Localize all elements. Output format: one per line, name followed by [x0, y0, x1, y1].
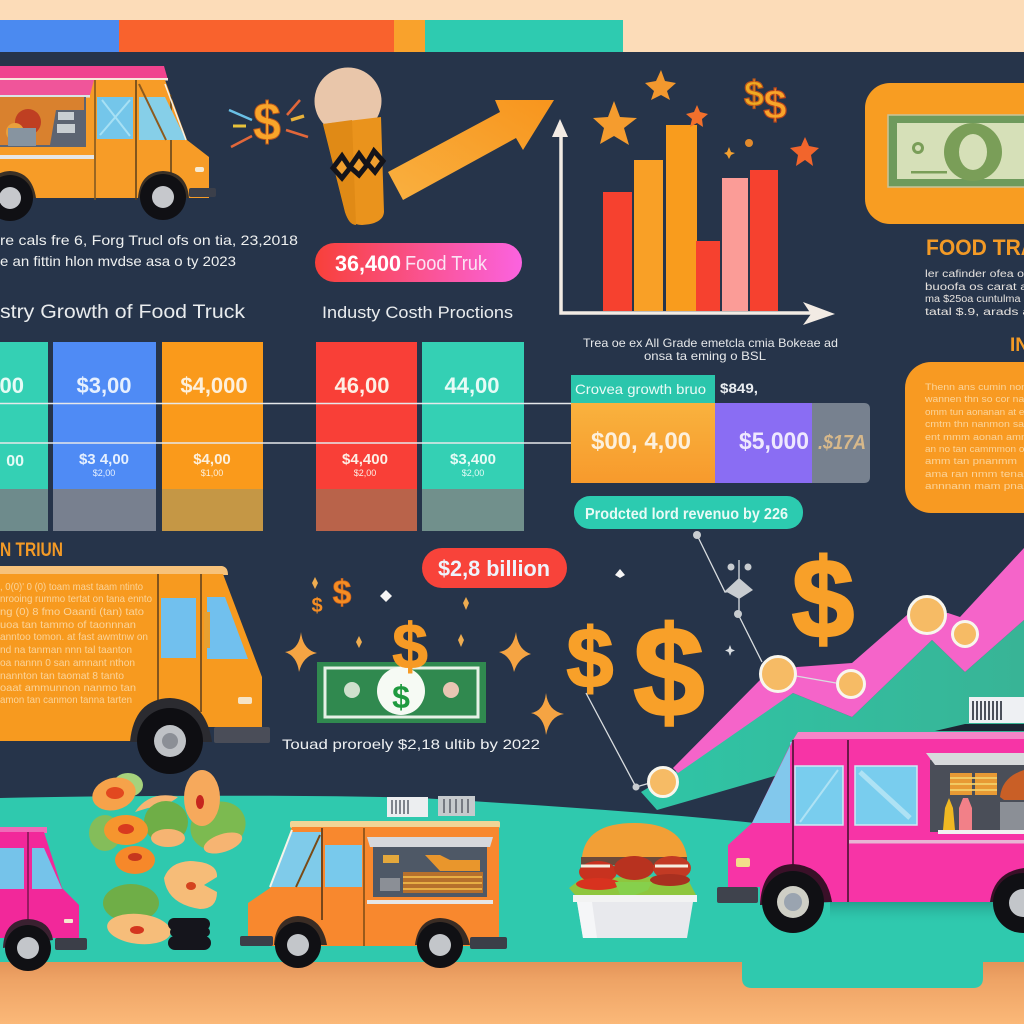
lower orange band	[0, 950, 1024, 1024]
icon: food slices	[89, 770, 253, 950]
icon: large orange truck with text	[0, 566, 270, 774]
chart bars	[603, 125, 778, 311]
panel: stacked revenue bar: $849,	[720, 380, 758, 396]
callout pill: projected revenue: Prodcted lord revenuo by 226	[585, 506, 788, 523]
truck body text: nd na tanman nnn tal taanton	[0, 644, 132, 656]
card body text: Thenn ans cumin nont	[925, 382, 1024, 393]
truck body text	[0, 581, 152, 706]
icon: orange truck bottom	[240, 796, 507, 968]
column: blue	[53, 342, 156, 531]
icon: burger	[569, 823, 697, 938]
text block: top left summary	[0, 232, 298, 269]
heading: industry cost projections: Industy Costh Proctions	[322, 303, 513, 322]
column: blue: $3 4,00	[79, 451, 129, 468]
icon: dollar bill with sparkles	[285, 574, 564, 735]
caption: total projected: Touad proroely $2,18 ultib by 2022	[282, 736, 540, 752]
text block: right description: tatal $.9, arads ar	[925, 307, 1024, 318]
panel: stacked revenue bar: .$17A	[818, 432, 866, 454]
column: red: $2,00	[354, 468, 376, 478]
card body text: ent mmm aonan amm	[925, 432, 1024, 443]
column: red: 46,00	[334, 373, 390, 398]
card body text: cmtm thn nanmon san	[925, 419, 1024, 430]
icon: dollar bill with sparkles: $	[311, 595, 323, 617]
callout pill: billion: $2,8 billion	[438, 556, 550, 581]
text block: top left summary: re cals fre 6, Forg Trucl ofs on tia, 23,2018	[0, 232, 298, 248]
area under ribbon	[641, 620, 1024, 840]
icon: large dollar left: $	[567, 611, 613, 705]
column: orange	[162, 342, 263, 531]
icon: dollar with burst: $	[253, 92, 281, 152]
column: teal 2: 44,00	[444, 373, 500, 398]
line chart: pink growth ribbon	[586, 531, 1024, 840]
chart axes	[561, 135, 815, 313]
column: blue: $2,00	[93, 468, 115, 478]
text block: top left summary: e an fittin hlon mvdse asa o ty 2023	[0, 253, 236, 269]
truck body text: ng (0) 8 fmo Oaanti (tan) tato	[0, 606, 144, 618]
bar columns	[0, 342, 524, 531]
column: red	[316, 342, 417, 531]
truck body text: nannton tan taomat 8 tanto	[0, 670, 124, 682]
text block: right description: ma $25oa cuntulma as	[925, 294, 1024, 305]
bar chart	[552, 119, 835, 325]
icon: dollar bill with sparkles: $	[392, 679, 410, 715]
icon: dollar with burst	[229, 92, 308, 152]
callout pill: food truck count: Food Truk	[405, 253, 488, 275]
card body text: wannen thn so cor nan	[924, 394, 1024, 405]
column: teal 2	[422, 342, 524, 531]
column: red: $4,400	[342, 451, 388, 468]
connecting lines	[586, 531, 836, 790]
column: blue: $3,00	[76, 373, 132, 398]
truck body text: nrooing rummo tertat on tana ennto	[0, 593, 152, 605]
truck body text: , 0(0)' 0 (0) toam mast taam ntinto	[0, 581, 143, 593]
column: orange: $4,00	[193, 451, 231, 468]
icon: large dollar centre: $	[633, 601, 705, 744]
panel: stacked revenue bar: Crovea growth bruo	[575, 381, 706, 397]
icon: dollar bill with sparkles: $	[392, 610, 428, 682]
ribbon band	[673, 548, 1024, 773]
icon: large pink truck	[717, 697, 1024, 933]
icon: large dollar right: $	[792, 536, 854, 661]
icon: dollar bill with sparkles: $	[333, 574, 352, 612]
chart data points	[648, 596, 978, 796]
panel: chart caption: Trea oe ex All Grade emetcla cmia Bokeae ad	[583, 336, 838, 350]
icons: stars and dollars above chart: $	[763, 81, 787, 128]
column: teal: 00	[6, 453, 24, 470]
dark main panel	[0, 52, 1024, 852]
icon: orange food truck top left	[0, 66, 216, 221]
icon: cone with scoop	[314, 68, 384, 225]
teal ground band	[0, 796, 1024, 988]
column: teal 2: $2,00	[462, 468, 484, 478]
top colour bar	[0, 20, 623, 54]
arrow: growth	[388, 100, 554, 200]
icons: stars and dollars above chart: $	[744, 73, 764, 114]
card body text	[924, 382, 1024, 492]
panel: stacked revenue bar: $00, 4,00	[591, 428, 691, 455]
panel: orange text card	[905, 362, 1024, 513]
panel: chart caption: onsa ta eming o BSL	[644, 349, 766, 363]
card body text: ama ran nmm tenan	[925, 469, 1024, 480]
panel: stacked revenue bar	[571, 375, 870, 483]
panel: money card	[865, 83, 1024, 224]
icons: stars and dollars above chart	[593, 70, 819, 166]
heading: truck section: N TRIUN	[0, 540, 63, 561]
callout pill: projected revenue	[574, 496, 803, 529]
card body text: amm tan pnanmm	[925, 456, 1017, 467]
icon: small pink truck	[0, 827, 87, 971]
truck body text: oa nannn 0 san amnant nthon	[0, 657, 135, 669]
column: teal 2: $3,400	[450, 451, 496, 468]
card body text: omm tun aonanan at en	[925, 407, 1024, 418]
text block: right description	[925, 269, 1024, 318]
panel: chart caption	[583, 336, 838, 363]
callout pill: billion	[422, 548, 567, 588]
column: teal	[0, 342, 48, 531]
truck body text: anntoo tomon. at fast awmtnw on	[0, 631, 148, 643]
connector lines	[0, 404, 571, 443]
column: orange: $1,00	[201, 468, 223, 478]
column: teal: 00	[0, 373, 24, 398]
text block: right description: buoofa os carat ad	[925, 282, 1024, 293]
heading: industry growth: stry Growth of Food Truck	[0, 302, 246, 323]
column: orange: $4,000	[180, 373, 248, 398]
callout pill: food truck count: 36,400	[335, 251, 401, 276]
panel: stacked revenue bar: $5,000	[739, 428, 809, 455]
card body text: an no tan cammmon on	[925, 444, 1024, 455]
card body text: annnann mam pnan	[925, 481, 1024, 492]
callout pill: food truck count	[315, 243, 522, 282]
truck body text: amon tan canmon tanna tarten	[0, 694, 132, 706]
text block: right description: ler cafinder ofea ore	[925, 269, 1024, 280]
truck body text: oaat ammunnon nanmo tan	[0, 682, 136, 694]
truck body text: uoa tan tammo of taonnnan	[0, 619, 136, 631]
